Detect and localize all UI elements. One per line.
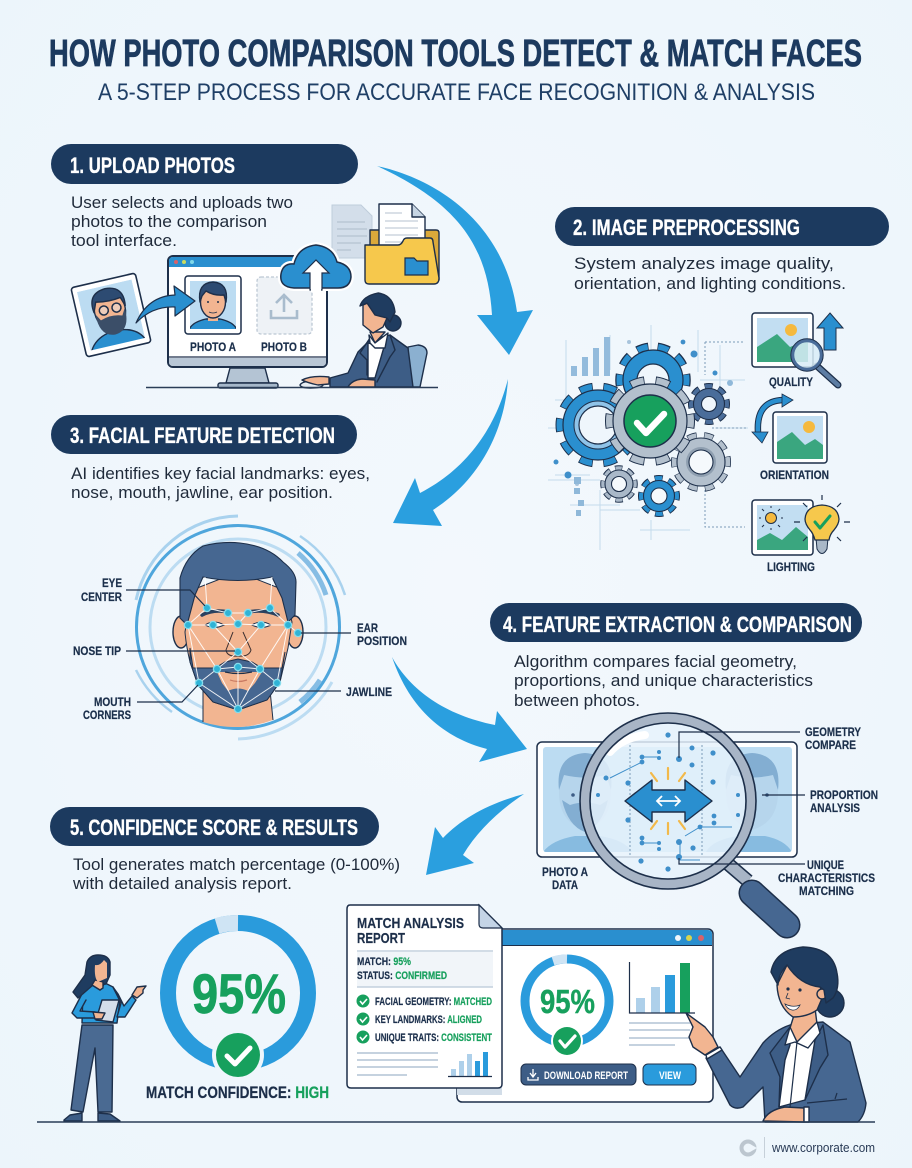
panel: step 5 confidence score and results [37,807,875,1122]
decorative bar chart [571,337,610,376]
callout: jawline [275,685,392,699]
callout: unique characteristics matching: MATCHING [799,884,854,898]
callout: ear position: POSITION [357,634,407,648]
callout: ear position [301,621,407,648]
step 1 description: photos to the comparison [71,213,267,231]
arrow: step 4 to step 5 [426,794,524,875]
callout: jawline: JAWLINE [346,685,392,699]
step 3 description: nose, mouth, jawline, ear position. [71,484,333,502]
panel: step 2 image preprocessing [548,207,889,574]
step 3 heading [51,415,357,454]
step 2 description: System analyzes image quality, [574,255,834,273]
callout: proportion analysis: ANALYSIS [810,801,860,815]
panel: step 4 feature extraction and comparison [490,603,878,925]
top blue gear [620,347,686,413]
icon: documents and folder [332,204,439,284]
footer url: www.corporate.com [771,1140,875,1155]
arrow: photo into slot [136,286,195,323]
step 3 description: AI identifies key facial landmarks: eyes, [71,465,370,483]
small blue gear [642,479,676,513]
compare double arrow [625,768,712,834]
callout: proportion analysis: PROPORTION [810,788,878,802]
icon: orientation image [752,394,829,482]
report checklist: FACIAL GEOMETRY: MATCHED [375,996,508,1008]
report checklist: KEY LANDMARKS: ALIGNED [375,1014,497,1026]
callout: ear position: EAR [357,621,378,635]
step 2 heading: 2. IMAGE PREPROCESSING [573,215,800,240]
arrow: step 1 to step 2 [377,166,533,355]
photo data frame [537,742,797,857]
callout: mouth corners: MOUTH [94,695,131,709]
footer: logo and website [742,1137,875,1158]
icon: lighting image [752,495,850,574]
step 1 description: User selects and uploads two [71,194,293,212]
subtitle: A 5-STEP PROCESS FOR ACCURATE FACE RECOGNITION & ANALYSIS [98,79,815,106]
step 1 heading [51,144,358,184]
callout: photo A data: PHOTO A [542,865,588,879]
magnifying glass [580,713,787,925]
illustration: woman with tablet [64,955,146,1121]
callout: unique characteristics matching: UNIQUE [807,858,844,872]
report title: MATCH ANALYSIS [357,915,464,932]
decorative data network [548,325,748,550]
callout: proportion analysis [762,788,878,815]
report checklist: UNIQUE TRAITS: CONSISTENT [375,1032,512,1044]
small bar chart [629,962,695,1045]
photo B slot [257,277,312,354]
tilted source photo [71,273,151,357]
step 4 description: proportions, and unique characteristics [514,672,813,690]
callout: eye center: EYE [102,576,122,590]
callout: mouth corners: CORNERS [83,708,131,722]
step 4 heading [490,603,862,642]
callout: photo A data: DATA [552,878,578,892]
step 2 description: orientation, and lighting conditions. [574,275,846,293]
callout: mouth corners [83,685,198,722]
callout: geometry compare: GEOMETRY [805,725,861,739]
orientation label: ORIENTATION [760,468,829,482]
step 1 description: tool interface. [71,232,177,250]
step 5 description: with detailed analysis report. [72,875,292,893]
results browser window [457,929,713,1102]
icon: quality image [752,313,843,389]
report mini chart [357,1052,492,1076]
step 5 description: Tool generates match percentage (0-100%) [73,856,400,874]
quality label: QUALITY [769,375,813,389]
ground line [37,1121,875,1123]
photo A label: PHOTO A [190,340,236,354]
view button: VIEW [659,1070,681,1082]
callout: nose tip: NOSE TIP [73,644,121,658]
photo B label: PHOTO B [261,340,307,354]
small dark gear [692,387,726,421]
step 4 description: Algorithm compares facial geometry, [514,653,797,671]
left blue gear [560,387,636,463]
95 percent score: 95% [192,962,286,1025]
gears [560,347,727,513]
photo A slot [185,276,241,354]
landmark mesh [188,577,298,709]
lens data dots [596,732,740,872]
main gray gear with check [610,381,690,461]
download report button: DOWNLOAD REPORT [544,1070,628,1082]
illustration: monitor with photo slots [168,256,327,388]
illustration: woman at computer [300,293,427,388]
report checklist [356,994,492,1044]
match confidence label: MATCH CONFIDENCE: HIGH [146,1083,329,1102]
callout: unique characteristics matching: CHARACTERISTICS [778,871,875,885]
step 3 heading: 3. FACIAL FEATURE DETECTION [70,423,335,448]
report status block: STATUS: CONFIRMED [357,970,462,982]
arrow: step 3 to step 4 [392,657,527,762]
desk line [146,386,438,388]
download report button [521,1064,636,1085]
big confidence ring [168,923,308,1081]
face with landmarks [173,542,303,727]
step 5 heading: 5. CONFIDENCE SCORE & RESULTS [70,815,358,840]
lighting label: LIGHTING [767,560,815,574]
icon: upload cloud [281,245,351,292]
small score ring: 95% [540,983,595,1020]
report status block [357,951,493,987]
small score ring [525,959,609,1057]
step 2 heading [555,207,889,246]
callout: eye center: CENTER [81,590,122,604]
scan rings [136,516,345,739]
report status block: MATCH: 95% [357,956,415,968]
report title: REPORT [357,930,405,947]
callout: eye center [81,576,205,606]
step 5 heading [50,807,379,846]
step 1 heading: 1. UPLOAD PHOTOS [70,153,235,178]
match analysis report sheet [347,905,502,1088]
right gray gear [675,436,727,488]
illustration: presenter pointing [686,947,866,1122]
view button [643,1064,696,1085]
callout: geometry compare: COMPARE [805,738,856,752]
magnifier rim [585,718,751,884]
step 4 description: between photos. [514,692,640,710]
arrow: step 2 to step 3 [393,379,508,526]
callout: geometry compare [679,725,861,758]
small gray gear [604,469,634,499]
landmark points [184,604,302,713]
footer logo [742,1142,757,1154]
panel: step 3 facial feature detection [51,415,407,739]
panel: step 1 upload photos [51,144,439,388]
callout: unique characteristics matching [679,858,875,898]
